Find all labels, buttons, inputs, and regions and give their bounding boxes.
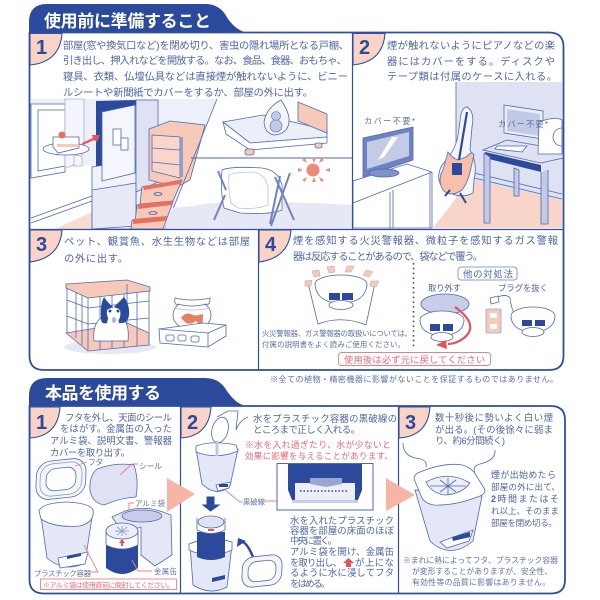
text: step 1 instructions: 部屋(窓や換気口など)を閉め切り、害虫の隠れ場所となる戸棚、 [63,39,349,52]
text: close room: 部屋を閉め切る。 [491,518,557,528]
label: remove: 取り外す [428,283,461,293]
section heading tab: before use [29,4,250,33]
text: step 1 instructions: カバーを取り出す。 [50,447,130,458]
step number badge 2 [181,407,211,438]
text: step 3 smoke [435,412,553,446]
divider lines: step columns [180,406,398,593]
text: heat note: が変形することがありますが、安全性、 [412,566,552,576]
illustration: room with fridge and shelves [31,99,217,229]
divider lines: step grid [30,33,563,370]
arrow: step 1 to 2 [167,478,195,512]
step 2: cover instruments [353,34,563,228]
illustration: dashed line detail [277,464,373,510]
text: step 2 instructions [387,39,557,83]
text: warning red: ※水を入れ過ぎたり、水が少ないと [245,439,391,450]
text: step 2 instructions: 器にはカバーをする。ディスクや [387,55,555,68]
step 2: add water [181,407,397,591]
text: step 2 placing: アルミ袋を開け、金属缶 [290,546,394,557]
illustration: unplugged detector [486,295,555,336]
callout: open just before use: ※アルミ袋は使用直前に開封してください。 [43,580,174,589]
illustration: container emitting smoke [414,464,485,550]
illustration: pouring water [196,411,248,492]
text: step 2 placing: 水を入れたプラスチック [290,515,394,526]
step 1: open [30,407,177,590]
part labels: 金属缶 [154,567,177,576]
text: step 2 instructions: テープ類は付属のケースに入れる。 [387,70,557,83]
arrow: down [203,497,219,511]
text: step 3 instructions [64,235,250,265]
illustration: can in container [189,516,232,591]
text: step 2 placing: るように水に浸してフタ [290,567,394,578]
text: step 1 instructions [50,412,173,458]
text: close room: 2時間またはそ [491,494,559,504]
text: step 2 water: 水をプラスチック容器の黒破線の [253,413,397,424]
leader lines: parts [75,462,152,572]
text: step 3 instructions: の外に出す。 [64,253,128,265]
illustration: bed with teddy bear [223,100,327,155]
panel frame: before use [30,32,564,370]
text: step 2 water: ところまで正しく入れる。 [253,424,360,435]
text: detector handling note: 火災警報器、ガス警報器の取扱いについては、 [262,329,412,338]
text: step 2 placing: をはめる。 [290,578,330,589]
illustration: goldfish bowl on block [159,298,226,347]
text: step 3 smoke: が出る。(その後徐々に弱ま [435,424,553,435]
step number badge 3: 3 [405,412,416,434]
label: cover unnecessary (TV): カバー不要* [364,116,416,126]
line: scene divider [191,157,352,159]
icon: sun [298,158,330,182]
text: step 1 instructions: ルシートや新聞紙でカバーをするか、部屋の外に出す。 [63,86,313,99]
icon: guitar in bag [439,107,475,203]
step number badge 3: 3 [36,234,47,256]
text: step 2 placing [290,515,395,589]
step 4: smoke detectors [259,230,558,366]
panel: before use [29,4,564,370]
step number badge 2: 2 [187,412,198,434]
step number badge 4: 4 [265,234,277,256]
label: black dashed line: 黒破線 [243,498,266,506]
icon: red up arrow [343,558,354,567]
text: step 2 placing: を取り出し、 [290,557,342,568]
text: heat note [403,555,558,587]
illustration: smoke outline [403,443,495,478]
illustration: aluminium bag [112,508,172,566]
text: step 3 smoke: り、約6分間続く) [435,435,505,446]
part labels: プラスチック容器 [34,569,92,578]
arrow: red rotate [436,307,470,349]
label: cover unnecessary (PC): カバー不要* [498,119,549,129]
step 1: clear the room [30,34,352,229]
text: close room [491,469,560,528]
text: step 3 smoke: 数十秒後に勢いよく白い煙 [435,412,553,423]
part labels: シール [139,462,162,471]
text: step 2 instructions: 煙が触れないようにピアノなどの楽 [387,39,555,52]
text: step 2 water [253,413,397,435]
text: step 2 placing: 中央に置く。 [290,535,337,546]
step number badge 2: 2 [359,37,370,59]
text: warning red: 効果に影響を与えることがあります。 [245,450,393,461]
text: step 2 placing: が上にな [355,557,394,568]
illustration: living room [353,82,563,228]
text: step 4 instructions [293,234,558,263]
text: detector handling note [262,329,412,349]
callout: open just before use [40,579,176,590]
text: step 1 instructions: をはがす。金属缶の入った [60,423,172,434]
illustration: plastic container [39,502,93,568]
text: heat note: 有効性等の品質に影響はありません。 [412,577,550,587]
text: step 1 instructions [63,39,349,99]
callout: restore after use: 使用後は必ず元に戻してください [344,354,485,365]
icon: desk with computer [483,105,563,224]
text: step 4 instructions: 煙を感知する火災警報器、微粒子を感知するガス警報 [293,234,558,247]
text: heat note: ※まれに熱によってフタ、プラスチック容器 [403,555,558,565]
label: unplug: プラグを抜く [498,283,548,293]
step number badge 1: 1 [36,37,47,59]
text: warning red [245,439,393,461]
text: close room: 部屋の外に出て、 [491,481,560,492]
illustration: dog in cage [64,280,156,354]
text: step 1 instructions: 寝具、衣類、仏壇仏具などは直接煙が触れないように、ビニー [63,70,348,83]
icon: television [353,127,432,228]
step number badge 4 [259,230,291,262]
part labels [34,458,177,578]
part labels: アルミ袋 [135,499,166,508]
text: close room: 煙が出始めたら [491,469,556,480]
text: step 2 placing: 容器を部屋の床面のほぼ [290,525,395,536]
text: step 1 instructions: アルミ袋、説明文書、警報器 [50,435,173,446]
divider: dotted line [412,263,414,348]
section heading tab: use [29,378,246,406]
arrow: red to fridge [82,135,100,145]
arrow: curved lid [240,542,253,557]
illustration: lid [35,457,87,501]
step number badge 1: 1 [36,412,47,434]
step number badge 2 [353,34,385,65]
illustration: detector covered with bag [305,266,379,325]
section heading tab: use: 本品を使用する [45,384,161,403]
text: step 3 instructions: ペット、観賞魚、水生生物などは部屋 [64,235,250,248]
panel: using the product [29,378,565,594]
arrow: step 2 to 3 [386,478,415,511]
text: close room: れ以上、そのまま [491,506,559,516]
text: step 1 instructions: 引き出し、押入れなどを開放する。なお、食品、食器、おもちゃ、 [63,54,347,67]
text: step 1 instructions: フタを外し、天面のシール [65,412,172,423]
divider: diagonal scenes [165,99,217,229]
text: detector handling note: 付属の説明書をよく読みご使用ください。 [262,340,405,349]
illustration: lid [242,554,282,588]
icon: cake on table [43,132,89,166]
arrow head: curved lid [237,538,246,547]
illustration: bedding drying in the sun [165,158,352,229]
step 3: smoke [399,407,560,587]
step number badge 3 [30,230,62,262]
footnote: no guarantee: ※全ての植物・精密機器に影響がないことを保証するものではありません。 [270,374,558,384]
panel frame: use [30,406,565,594]
step number badge 1 [30,407,60,438]
label: other methods: 他の対処法 [463,268,514,280]
leader line: dashed mark [225,490,315,502]
illustration: detector being removed [420,294,470,349]
step number badge 1 [30,34,62,65]
illustration: seal [90,464,137,505]
illustration: metal can [106,523,138,574]
step 3: pets [30,230,250,354]
text: step 4 instructions: 器は反応することがあるので、袋などで覆う。 [293,250,483,263]
part labels: フタ [88,458,103,467]
icon: dog [94,297,129,341]
step number badge 3 [399,407,430,438]
section heading tab: before use: 使用前に準備すること [44,11,211,31]
